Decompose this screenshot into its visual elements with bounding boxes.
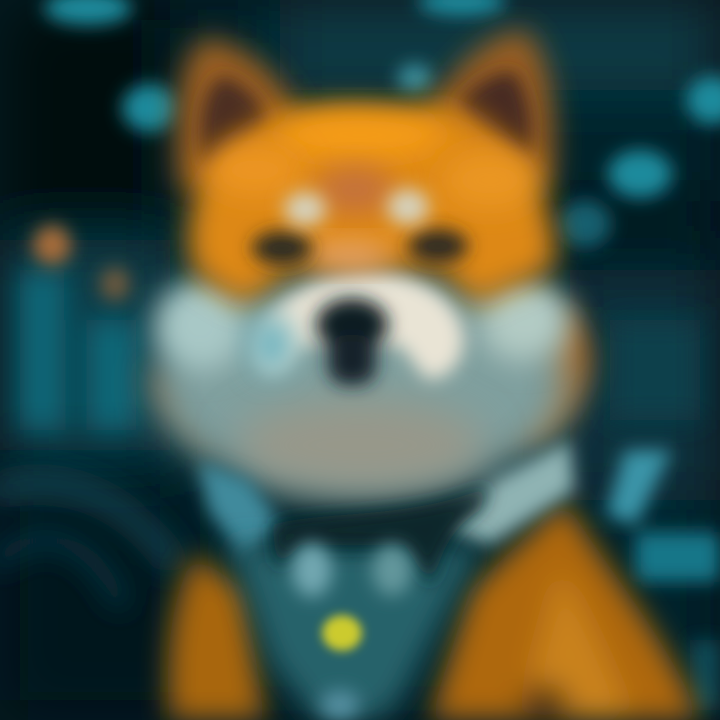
dog brows: white markings: [284, 189, 429, 226]
background: teal building columns: [20, 270, 700, 430]
dog body: orange shoulders: [168, 500, 700, 720]
harness: teal bib: [230, 545, 480, 720]
dog eyes: [252, 229, 468, 265]
collar: pale teal band: [198, 440, 575, 560]
collar: dark strap: [272, 485, 490, 585]
dog muzzle: white arch: [250, 242, 464, 379]
dog face: white and teal muzzle: [154, 273, 571, 497]
background: bright cyan light blobs: [44, 0, 720, 248]
background: cyan shards lower right: [606, 450, 720, 710]
dog head: orange fur: [188, 102, 556, 305]
dog ear: left: [176, 38, 300, 190]
background: dark curved shapes lower left: [0, 484, 170, 600]
dog neck ruff: brown side fur: [150, 300, 590, 465]
background: orange bokeh lights: [33, 225, 130, 301]
pendant: yellow tag: [322, 615, 362, 651]
dog ear: right: [430, 30, 555, 190]
dog nose: dark snout: [316, 298, 388, 385]
harness: pale round studs: [292, 543, 412, 720]
